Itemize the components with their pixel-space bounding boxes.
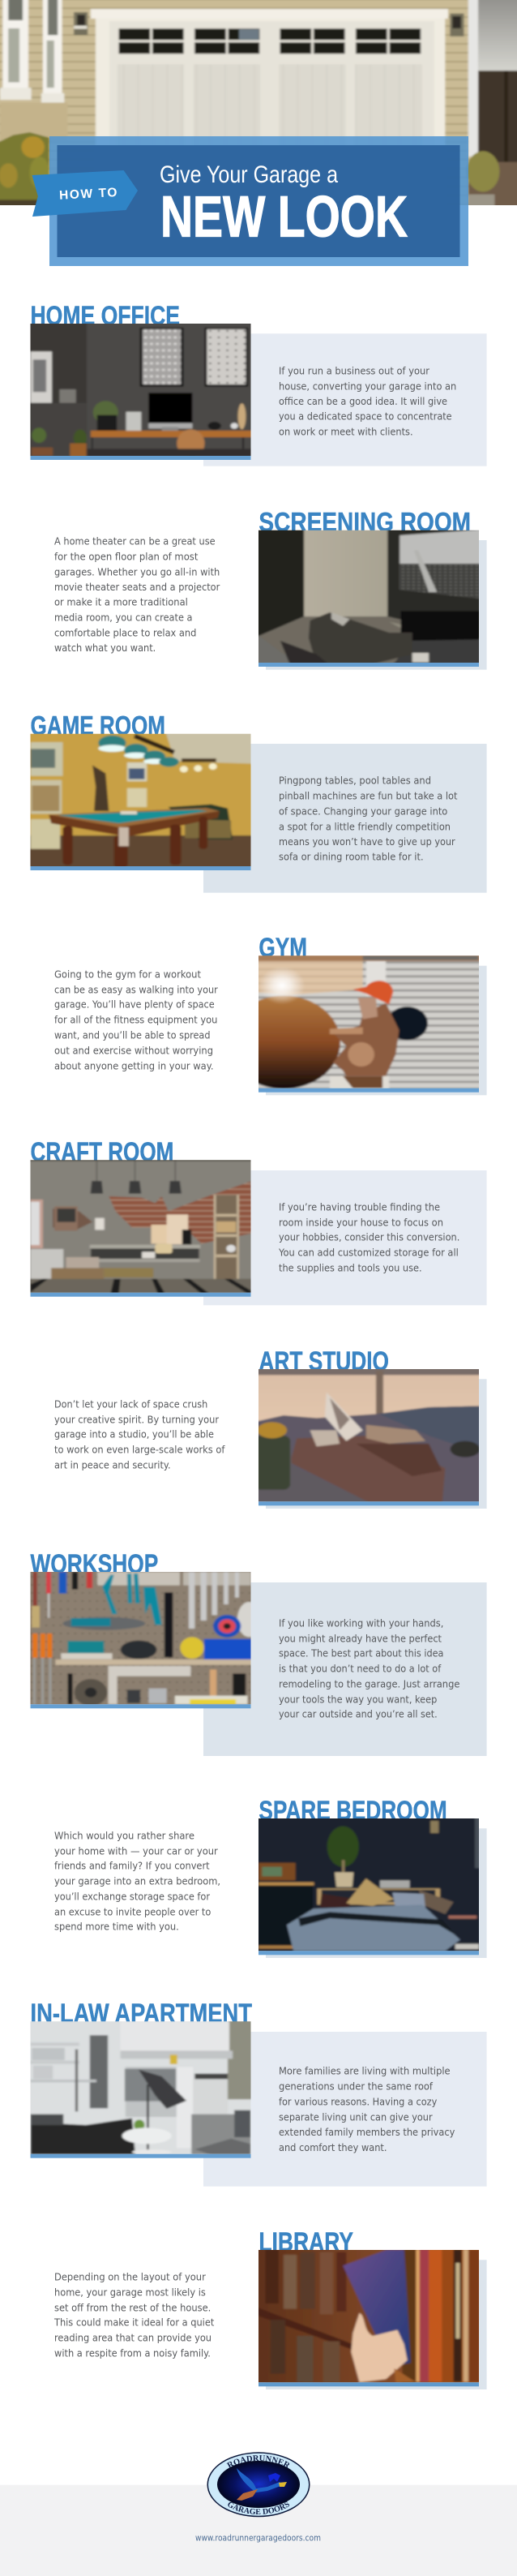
body text: means you won’t have to give up your — [279, 835, 456, 848]
photo: art studio — [258, 1369, 479, 1502]
hero photo: garage door — [0, 0, 517, 205]
backing panel — [266, 1828, 487, 1958]
body text: If you like working with your hands, — [279, 1617, 443, 1629]
body text: is that you don’t need to do a lot of — [279, 1663, 442, 1675]
body text: to work on even large-scale works of — [54, 1444, 225, 1456]
heading: SCREENING ROOM — [258, 507, 471, 537]
text panel — [203, 1170, 487, 1305]
title line 2: NEW LOOK — [160, 186, 408, 250]
section: spare bedroom — [54, 1795, 487, 1958]
photo accent bar — [258, 1501, 479, 1505]
photo: gym — [258, 955, 479, 1088]
body text: on work or meet with clients. — [279, 426, 413, 438]
section: game room — [27, 711, 487, 893]
body text: for all of the fitness equipment you — [54, 1014, 217, 1026]
heading: GYM — [258, 933, 307, 963]
body text: extended family members the privacy — [279, 2126, 455, 2138]
banner panel — [32, 136, 468, 266]
photo accent bar — [258, 2382, 479, 2386]
body text: can be as easy as walking into your — [54, 984, 219, 996]
photo accent bar — [31, 1704, 251, 1708]
backing panel — [266, 1379, 487, 1509]
body text: you might already have the perfect — [279, 1633, 442, 1645]
body text — [279, 365, 456, 438]
footer url: www.roadrunnergaragedoors.com — [195, 2533, 321, 2544]
body text: your car outside and you’re all set. — [279, 1708, 438, 1720]
body text: friends and family? If you convert — [54, 1860, 210, 1872]
photo: craft room — [31, 1160, 251, 1293]
body text: reading area that can provide you — [54, 2332, 212, 2344]
photo accent bar — [258, 663, 479, 667]
body text: You can add customized storage for all — [278, 1247, 459, 1259]
logo: Roadrunner Garage Doors — [207, 2452, 310, 2518]
body text: for the open floor plan of most — [54, 551, 199, 563]
heading: WORKSHOP — [31, 1548, 158, 1578]
banner inner panel — [57, 145, 460, 257]
body text: a spot for a little friendly competition — [279, 821, 451, 833]
body text: If you run a business out of your — [279, 365, 430, 377]
body text — [54, 1830, 220, 1933]
footer band — [0, 2485, 517, 2576]
heading: GAME ROOM — [31, 711, 165, 741]
logo: Roadrunner Garage Doors: ROADRUNNER — [227, 2455, 289, 2469]
body text: house, converting your garage into an — [279, 380, 456, 393]
section: screening room — [54, 507, 487, 670]
body text: garage. You’ll have plenty of space — [54, 998, 215, 1011]
heading: ART STUDIO — [258, 1346, 389, 1376]
heading: LIBRARY — [258, 2226, 353, 2256]
body text: garages. Whether you go all-in with — [54, 566, 220, 578]
section: home office — [27, 300, 487, 466]
heading: SPARE BEDROOM — [258, 1795, 447, 1825]
body text: with a respite from a noisy family. — [54, 2347, 211, 2359]
body text: Depending on the layout of your — [54, 2271, 207, 2283]
body text: separate living unit can give your — [279, 2111, 433, 2123]
photo: library — [258, 2250, 479, 2383]
body text: generations under the same roof — [279, 2080, 434, 2093]
body text: More families are living with multiple — [279, 2065, 451, 2077]
body text: want, and you’ll be able to spread — [54, 1029, 211, 1041]
body text: for various reasons. Having a cozy — [279, 2096, 437, 2108]
photo accent bar — [258, 1088, 479, 1093]
body text — [54, 968, 219, 1072]
text panel — [203, 333, 487, 466]
body text — [53, 2271, 214, 2359]
heading: HOME OFFICE — [31, 300, 180, 331]
body text: This could make it ideal for a quiet — [53, 2316, 214, 2329]
body text: remodeling to the garage. Just arrange — [279, 1678, 459, 1690]
section: library — [53, 2226, 487, 2389]
body text: Which would you rather share — [54, 1830, 194, 1842]
body text: your hobbies, consider this conversion. — [279, 1231, 459, 1243]
body text — [54, 535, 220, 654]
body text: and comfort they want. — [279, 2141, 387, 2153]
photo: screening room — [258, 530, 479, 663]
body text: garage into a studio, you’ll be able — [54, 1428, 214, 1440]
photo accent bar — [258, 1951, 479, 1955]
backing panel — [266, 2260, 487, 2389]
body text: the supplies and tools you use. — [279, 1262, 422, 1274]
body text: If you’re having trouble finding the — [279, 1201, 440, 1213]
title line 1: Give Your Garage a — [160, 161, 338, 188]
section: craft room — [27, 1137, 487, 1305]
body text: of space. Changing your garage into — [279, 805, 447, 818]
photo accent bar — [31, 866, 251, 870]
photo: home office — [31, 324, 251, 456]
body text: A home theater can be a great use — [54, 535, 216, 547]
ribbon: how to: HOW TO — [59, 186, 118, 203]
body text: office can be a good idea. It will give — [279, 395, 447, 407]
body text: your home with — your car or your — [54, 1845, 219, 1857]
heading: IN-LAW APARTMENT — [31, 1999, 252, 2029]
logo: Roadrunner Garage Doors: GARAGE DOORS — [228, 2501, 289, 2514]
ribbon: how to — [32, 170, 138, 217]
photo accent bar — [31, 2154, 251, 2158]
text panel — [203, 1582, 487, 1756]
text panel — [203, 744, 487, 893]
body text: room inside your house to focus on — [279, 1217, 443, 1229]
backing panel — [266, 966, 487, 1095]
body text: media room, you can create a — [54, 612, 193, 624]
body text: pinball machines are fun but take a lot — [279, 790, 458, 802]
body text: art in peace and security. — [54, 1459, 171, 1471]
backing panel — [266, 540, 487, 670]
body text: watch what you want. — [54, 642, 156, 654]
text panel — [203, 2032, 487, 2187]
body text: Don’t let your lack of space crush — [54, 1398, 207, 1410]
body text: home, your garage most likely is — [54, 2286, 206, 2299]
photo accent bar — [31, 1293, 251, 1297]
body text: Going to the gym for a workout — [54, 968, 201, 981]
body text — [278, 1201, 459, 1274]
body text: out and exercise without worrying — [54, 1045, 213, 1057]
body text: spend more time with you. — [54, 1921, 179, 1933]
body text: your creative spirit. By turning your — [54, 1414, 220, 1426]
section: art studio — [54, 1346, 487, 1509]
heading: CRAFT ROOM — [31, 1137, 173, 1167]
body text: set off from the rest of the house. — [54, 2302, 211, 2314]
body text — [279, 775, 458, 863]
body text: Pingpong tables, pool tables and — [279, 775, 431, 787]
photo: spare bedroom — [258, 1818, 479, 1951]
body text: you a dedicated space to concentrate — [279, 410, 452, 423]
body text: or make it a more traditional — [54, 596, 188, 608]
section: in-law apartment — [27, 1999, 487, 2187]
body text: about anyone getting in your way. — [54, 1060, 214, 1072]
body text: your garage into an extra bedroom, — [54, 1875, 220, 1887]
photo accent bar — [31, 456, 251, 460]
photo: game room — [31, 733, 251, 866]
body text: comfortable place to relax and — [54, 627, 196, 639]
body text — [279, 1617, 459, 1720]
body text: movie theater seats and a projector — [54, 581, 220, 593]
body text: your tools the way you want, keep — [279, 1694, 437, 1706]
body text: space. The best part about this idea — [279, 1647, 443, 1659]
body text — [54, 1398, 225, 1471]
photo: workshop — [31, 1572, 251, 1705]
section: gym — [54, 933, 487, 1095]
photo: in-law apartment — [31, 2021, 251, 2154]
section: workshop — [27, 1548, 487, 1756]
body text: sofa or dining room table for it. — [279, 851, 424, 863]
body text: an excuse to invite people over to — [54, 1906, 211, 1918]
body text — [279, 2065, 455, 2153]
body text: you’ll exchange storage space for — [54, 1891, 211, 1903]
